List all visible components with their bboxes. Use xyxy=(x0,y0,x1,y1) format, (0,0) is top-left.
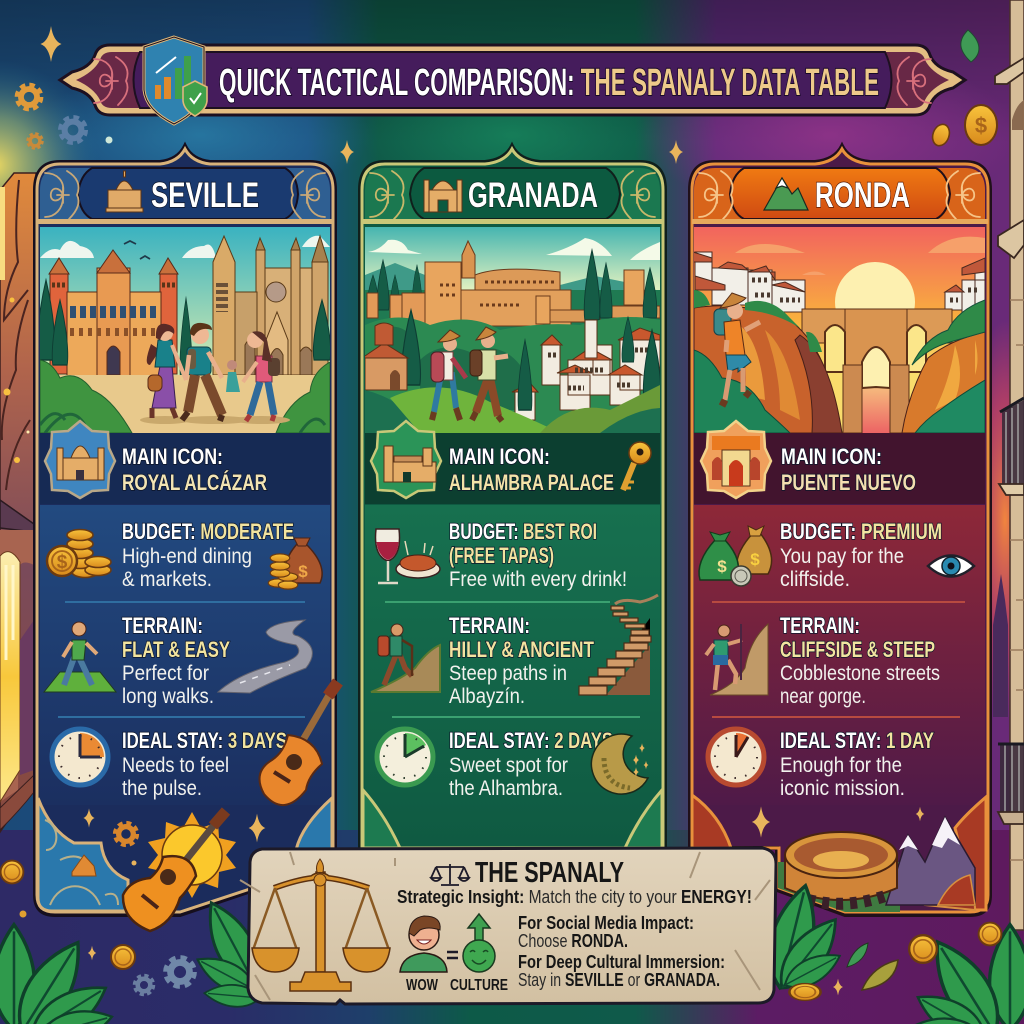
icon: key xyxy=(623,442,651,490)
header xyxy=(38,168,332,224)
bottom plants and coins xyxy=(0,861,1024,1024)
row: budget: BUDGET: MODERATE xyxy=(122,519,294,544)
main icon band: MAIN ICON: xyxy=(781,444,882,469)
row: terrain: TERRAIN: xyxy=(122,613,203,638)
icon: clock xyxy=(708,729,764,785)
icon: money bags: $ xyxy=(750,550,760,569)
row: terrain: CLIFFSIDE & STEEP xyxy=(780,637,935,662)
row: terrain: Albayzín. xyxy=(449,685,525,708)
icon: winding road xyxy=(218,620,312,693)
row: terrain: TERRAIN: xyxy=(449,613,530,638)
cliffs xyxy=(694,306,842,433)
village xyxy=(694,252,985,312)
row: ideal stay: iconic mission. xyxy=(780,777,905,800)
row: terrain: long walks. xyxy=(122,685,214,708)
icon: guitar xyxy=(260,682,338,805)
heading: THE SPANALY xyxy=(475,857,624,889)
icon: sun and guitar xyxy=(117,811,236,931)
header: GRANADA xyxy=(468,176,598,215)
icon: large scales xyxy=(252,859,390,991)
icon: stairs xyxy=(579,595,658,695)
icon: wine and tapas xyxy=(376,529,440,583)
row: terrain: near gorge. xyxy=(780,685,866,708)
row: ideal stay: IDEAL STAY: 2 DAYS xyxy=(449,728,613,753)
row: terrain: TERRAIN: xyxy=(780,613,860,638)
row: terrain xyxy=(706,613,940,708)
icon: money bag: $ xyxy=(298,562,308,581)
panel: granada xyxy=(360,146,665,850)
icon: coins: $ xyxy=(57,552,68,573)
panel: the spanaly xyxy=(240,848,776,1004)
hikers xyxy=(431,327,508,421)
row: terrain: HILLY & ANCIENT xyxy=(449,637,594,662)
icon: alhambra badge xyxy=(371,421,441,498)
panel: the spanaly: Stay in SEVILLE or GRANADA. xyxy=(518,970,720,990)
row: terrain xyxy=(44,613,312,708)
row: terrain xyxy=(371,595,658,708)
row: budget: BUDGET: PREMIUM xyxy=(780,519,942,544)
row: budget xyxy=(699,519,974,591)
row: ideal stay xyxy=(377,728,648,800)
row: budget: & markets. xyxy=(122,568,212,591)
main icon band: ALHAMBRA PALACE xyxy=(449,470,614,495)
shield icon xyxy=(144,37,207,124)
main icon band xyxy=(694,421,985,504)
main icon band: PUENTE NUEVO xyxy=(781,470,916,495)
icon: mountains xyxy=(764,178,808,210)
bridge xyxy=(802,309,952,433)
icon: mosque xyxy=(424,180,462,212)
row: terrain: Steep paths in xyxy=(449,662,567,685)
icon: eye xyxy=(928,556,974,576)
row: terrain: Cobblestone streets xyxy=(780,662,940,685)
row: budget: cliffside. xyxy=(780,568,850,591)
panel: ronda xyxy=(690,146,990,915)
row: ideal stay xyxy=(52,728,287,800)
corner ornaments xyxy=(692,795,986,910)
row: ideal stay: Enough for the xyxy=(780,754,902,777)
icon: money bags: $ xyxy=(717,557,727,576)
icon: clock xyxy=(52,729,108,785)
main icon band: MAIN ICON: xyxy=(449,444,550,469)
panel: the spanaly: Choose RONDA. xyxy=(518,931,628,951)
illustration: seville square xyxy=(37,227,331,433)
row: ideal stay: the pulse. xyxy=(122,777,202,800)
corner ornaments xyxy=(363,790,662,848)
floating decorations top: $ xyxy=(975,113,987,138)
icon: green smile arrow xyxy=(463,914,495,972)
main icon band xyxy=(40,421,330,504)
people xyxy=(147,323,280,421)
row: terrain: Perfect for xyxy=(122,662,209,685)
main icon band xyxy=(365,421,660,504)
icon: money bag xyxy=(268,538,322,589)
row: ideal stay: IDEAL STAY: 1 DAY xyxy=(780,728,934,753)
panel: seville xyxy=(35,146,335,915)
row: budget: You pay for the xyxy=(780,545,904,568)
balcony upper xyxy=(999,398,1024,495)
panel: the spanaly: CULTURE xyxy=(450,977,508,994)
icon: royal alcazar badge xyxy=(45,421,115,498)
panel: the spanaly: For Deep Cultural Immersion: xyxy=(518,952,725,972)
row: budget: Free with every drink! xyxy=(449,568,627,591)
icon: money bags xyxy=(699,526,772,586)
icon: clock xyxy=(377,729,433,785)
icon: cathedral xyxy=(106,171,143,212)
left cliff xyxy=(0,173,36,832)
icon: small scales xyxy=(431,864,469,885)
row: budget: High-end dining xyxy=(122,545,252,568)
panel: the spanaly: WOW xyxy=(406,977,439,994)
panel: the spanaly: For Social Media Impact: xyxy=(518,913,694,933)
row: budget: (FREE TAPAS) xyxy=(449,543,554,568)
row: ideal stay xyxy=(708,728,934,800)
main icon band: MAIN ICON: xyxy=(122,444,223,469)
row: budget xyxy=(47,519,322,591)
icon: crescent moon xyxy=(591,734,648,794)
row: ideal stay: the Alhambra. xyxy=(449,777,563,800)
row: ideal stay: IDEAL STAY: 3 DAYS xyxy=(122,728,287,753)
row: budget: BUDGET: BEST ROI xyxy=(449,519,597,544)
header xyxy=(692,168,988,224)
panel: the spanaly: Strategic Insight: Match the city to your ENERGY! xyxy=(397,887,752,907)
icon: walker on mat xyxy=(44,622,116,692)
title banner xyxy=(60,37,965,124)
row: budget xyxy=(376,519,627,591)
corner ornaments xyxy=(38,798,332,911)
icon: colosseum and mountains xyxy=(778,817,975,912)
icon: smiling traveller xyxy=(400,916,447,972)
row: ideal stay: Sweet spot for xyxy=(449,754,568,777)
floating decorations top xyxy=(19,26,997,164)
header xyxy=(363,168,662,224)
main icon band: ROYAL ALCÁZAR xyxy=(122,470,267,495)
row: terrain: FLAT & EASY xyxy=(122,637,230,662)
illustration: puente nuevo xyxy=(693,227,985,433)
icon: puente nuevo badge xyxy=(701,421,771,498)
row: ideal stay: Needs to feel xyxy=(122,754,229,777)
equals sign xyxy=(447,952,458,958)
illustration: alhambra hill xyxy=(362,227,661,433)
icon: climber on cliff xyxy=(706,624,768,695)
icon: coins xyxy=(47,530,111,578)
hiker xyxy=(714,293,760,406)
header: SEVILLE xyxy=(151,176,259,215)
heading xyxy=(431,857,624,889)
right building xyxy=(993,0,1024,930)
header: RONDA xyxy=(815,176,910,215)
balcony lower xyxy=(998,744,1024,824)
icon: hiker on slope xyxy=(371,624,440,692)
